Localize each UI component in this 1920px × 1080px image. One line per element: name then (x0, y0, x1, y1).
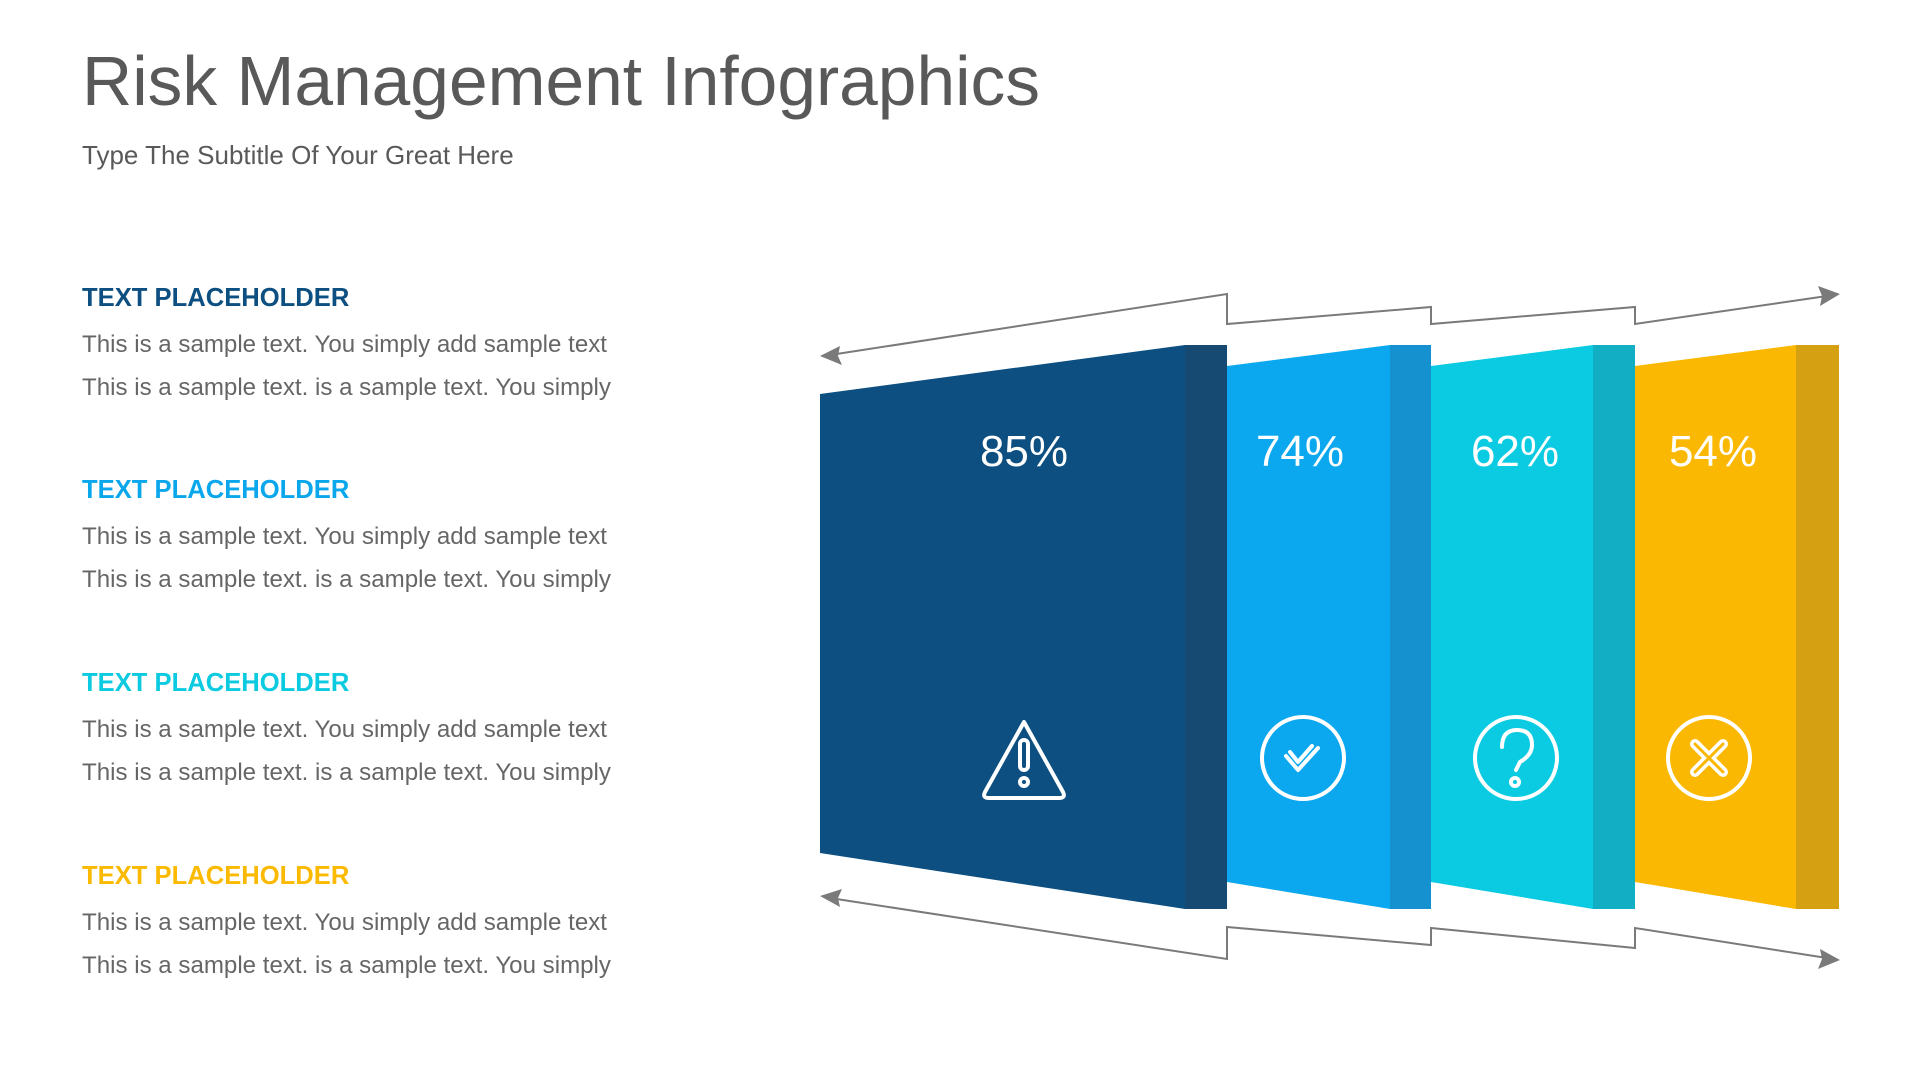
icon: warning (984, 722, 1064, 798)
panel 3: 62%: 62% (1471, 427, 1559, 476)
arrow: bottom (820, 889, 1840, 969)
text block 3: This is a sample text. You simply add sample text (82, 716, 607, 743)
text block 3: This is a sample text. is a sample text. You simply (82, 759, 611, 786)
arrow: top (820, 286, 1840, 365)
text block 3 (82, 669, 611, 786)
text block 1: This is a sample text. You simply add sample text (82, 331, 607, 358)
panel 1: 85%: 85% (980, 427, 1068, 476)
icon: cross (1668, 717, 1750, 799)
panel 1: 85% (820, 345, 1227, 909)
subtitle: Type The Subtitle Of Your Great Here (82, 140, 514, 170)
text block 2: TEXT PLACEHOLDER (82, 476, 349, 504)
panel 2: 74%: 74% (1256, 427, 1344, 476)
text block 1: TEXT PLACEHOLDER (82, 284, 349, 312)
panel 2: 74% (1227, 345, 1431, 909)
text block 2: This is a sample text. You simply add sample text (82, 523, 607, 550)
panel 4: 54%: 54% (1669, 427, 1757, 476)
text block 4: TEXT PLACEHOLDER (82, 862, 349, 890)
text block 4: This is a sample text. You simply add sample text (82, 909, 607, 936)
title: Risk Management Infographics (82, 42, 1040, 120)
text block 4: This is a sample text. is a sample text. You simply (82, 952, 611, 979)
icon: question (1475, 717, 1557, 799)
text block 2: This is a sample text. is a sample text. You simply (82, 566, 611, 593)
icon: check (1262, 717, 1344, 799)
text block 1: This is a sample text. is a sample text. You simply (82, 374, 611, 401)
text block 2 (82, 476, 611, 593)
text block 4 (82, 862, 611, 979)
panel 4: 54% (1635, 345, 1839, 909)
text block 1 (82, 284, 611, 401)
text block 3: TEXT PLACEHOLDER (82, 669, 349, 697)
panel 3: 62% (1431, 345, 1635, 909)
